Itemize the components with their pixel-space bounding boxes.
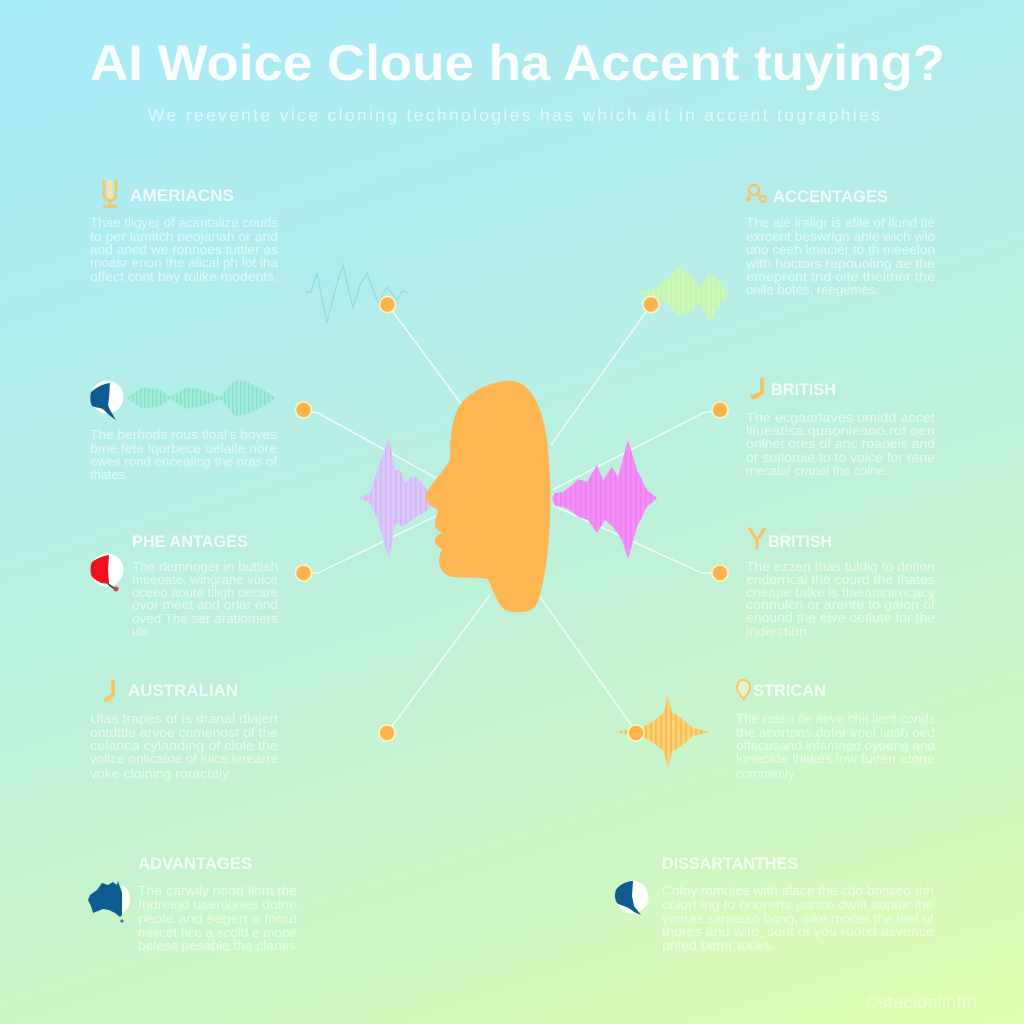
text block: strican: The resso tle aove chit llent conds [736, 712, 935, 726]
text block: british one: The ecgaarlaves omidd accet [746, 411, 936, 425]
icon: linked nodes [746, 185, 766, 202]
text block: british one [746, 411, 936, 478]
waveform: light green bars [633, 267, 729, 322]
text block: advantages: Indreind usenlones dolne [138, 898, 297, 912]
text block: americans: and aned we ronnoes tuttler as [90, 243, 278, 257]
panel: dissartanthes [615, 855, 935, 953]
text block: phe antages: meeoate. wingrane voice [132, 573, 278, 587]
panel: americans [90, 180, 278, 284]
text block: british one: or sotloroie to to voice for rene [746, 451, 935, 465]
text block: americans: to per lamitch peojanah or and [90, 230, 278, 244]
title: AI Woice Cloue ha Accent tuying? [90, 35, 945, 91]
heading: advantages: ADVANTAGES [138, 855, 252, 873]
text block: dissartanthes: colort ing to onorerts uance dwiit aopiur the [662, 898, 934, 912]
text block: british one: mecalo/ cranel the colne. [746, 464, 888, 478]
heading: americans: AMERIACNS [130, 187, 234, 205]
text block: dissartanthes: pnled beter tooks. [662, 939, 775, 953]
text block: phe antages: oved The ser aratiomers [132, 612, 278, 626]
panel: australian [90, 680, 279, 781]
icon: music note [751, 378, 762, 397]
text block: phe antages: ule. [132, 625, 151, 639]
waveform: teal bars [127, 380, 276, 416]
text block: phe antages: oceeo aoute tlligh oecare [132, 586, 278, 600]
icon: location pin [737, 680, 750, 699]
text block: americans: Thae tligyer of acantalize couds [90, 216, 278, 230]
icon: microphone [103, 180, 117, 206]
text block: dissartanthes: thores and wite, sont of you rootel acvence [662, 925, 934, 939]
icon: australia map [88, 881, 130, 923]
text block: dissartanthes: Cnloy ramules with alace the cdd bossed thn [662, 884, 934, 898]
text block: accentages: with hoctors repouoling ae the [745, 257, 935, 271]
heading: phe antages: PHE ANTAGES [132, 533, 248, 551]
text block: flag note one: thates [90, 468, 125, 482]
text block: british two: indiestion. [746, 625, 811, 639]
text block: australian [90, 712, 279, 781]
heading: british two: BRITISH [768, 533, 832, 551]
panel: phe antages [90, 533, 278, 639]
text block: flag note one: ewes rond encealing the pras of [90, 455, 278, 469]
panel: british two [746, 528, 936, 639]
panel: british one [746, 378, 936, 478]
panel: accentages [745, 185, 935, 297]
text block: accentages: emeprent tnd oite thelther the [746, 270, 935, 284]
text block: advantages: miscet fice a scold e mone [138, 926, 297, 940]
text block: australian: ontdttle arvoe comenost of the [90, 726, 278, 740]
text block: accentages: onile botes, reegemes. [746, 283, 879, 297]
panel: strican [736, 680, 935, 781]
text block: advantages [138, 884, 300, 953]
icon: tuning fork [749, 528, 765, 549]
text block: british two: cneape talke is tlaeatanirocacy [746, 586, 936, 600]
text block: accentages: The ale iraligr is afile of llond tie [746, 216, 935, 230]
text block: americans: moasr erion the alical ph lot lha [90, 256, 278, 270]
text block: british two: The ezzen thas tuldig to dotion [746, 560, 935, 574]
central head silhouette [426, 381, 550, 612]
text block: accentages: exrcent beswrlgn ahle wich wio [746, 230, 935, 244]
heading: strican: STRICAN [753, 682, 826, 700]
text block: australian: Ulas trapes of is dranal dlajert [90, 712, 279, 726]
text block: strican: commenly. [736, 767, 797, 781]
waveform: purple input voice [360, 438, 432, 558]
waveform: orange bars [615, 694, 710, 768]
text block: strican: lonecide lhitkes low fuiren atone [736, 752, 935, 766]
text block: strican [736, 712, 935, 781]
waveform: pink cloned voice [552, 440, 657, 559]
text block: americans: offect cont bay tolike modents. [90, 270, 278, 284]
text block: flag note one [90, 428, 278, 482]
panel: flag note one [90, 380, 278, 482]
connector node dots [296, 296, 728, 741]
text block: australian: voke cloining roracutly. [90, 767, 232, 781]
text block: accentages: uno ceeh lmacier to th meeelon [746, 243, 935, 257]
watermark: ©stecionlinfm [865, 993, 977, 1012]
waveform: thin teal line [306, 265, 407, 323]
heading: british one: BRITISH [771, 381, 836, 399]
text block: dissartanthes: youras sarresso bong, oike moder the lnet of [662, 912, 935, 926]
text block: dissartanthes [662, 884, 935, 953]
text block: phe antages: ovor meet and orlar end [132, 598, 278, 612]
text block: british one: lllueatisa.quaonleaoo.rof oen [746, 424, 935, 438]
text block: phe antages: The demnoger in buttish [132, 560, 278, 574]
heading: dissartanthes: DISSARTANTHES [662, 855, 798, 873]
icon: blue and white speech flag [90, 380, 124, 420]
panel: advantages [88, 855, 300, 953]
text block: phe antages [132, 560, 278, 639]
text block: advantages: beless pesable the clanes. [138, 939, 300, 953]
subtitle: We reevente vice cloning technologies has which ait in accent tographies. [148, 105, 887, 125]
heading: accentages: ACCENTAGES [773, 188, 888, 206]
icon: blue and white speech flag [615, 880, 648, 915]
icon: music note [104, 680, 113, 700]
text block: australian: voltce onlicatoe of loice lerearre [90, 752, 278, 766]
text block: british two: enound the elve oetlute for the [746, 611, 935, 625]
connector lines [303, 305, 720, 733]
text block: flag note one: bme fete lqorbece uelaile nore [90, 442, 277, 456]
text block: advantages: The carwily nood llom the [138, 884, 297, 898]
text block: british two [746, 560, 936, 639]
text block: strican: offecusand infamned oyoeng and [736, 739, 935, 753]
text block: british one: onlnet ores of anc roaoeis and [746, 437, 935, 451]
text block: accentages [745, 216, 935, 297]
icon: red and white speech flag [90, 554, 124, 592]
text block: advantages: peole and segert o fnout [138, 912, 298, 926]
text block: british two: endorrical the courd the thates [746, 573, 935, 587]
text block: australian: celanca cylanding of clole the [90, 739, 278, 753]
text block: strican: the acortons dofer voel linsh oed [736, 726, 935, 740]
text block: british two: connulcn or arente to gaion of [746, 598, 936, 612]
text block: flag note one: The berhods rous tloal's boyes [90, 428, 277, 442]
text block: americans [90, 216, 278, 284]
heading: australian: AUSTRALIAN [128, 682, 238, 700]
